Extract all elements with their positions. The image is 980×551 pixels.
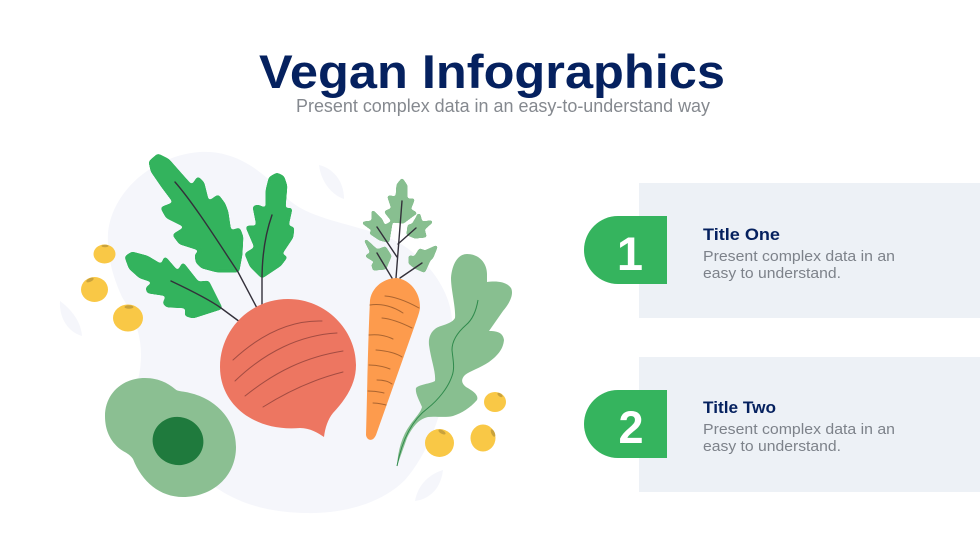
number 2: 2 xyxy=(618,402,644,453)
heading two: Title Two xyxy=(703,398,776,417)
decorative petals xyxy=(60,165,443,501)
beet stems xyxy=(171,182,272,322)
subtitle: Present complex data in an easy-to-understand way xyxy=(296,96,710,116)
number 1: 1 xyxy=(617,227,643,280)
carrot greens xyxy=(364,180,436,271)
number tab 2 xyxy=(584,390,667,458)
title: Vegan Infographics xyxy=(259,45,725,98)
description one: Present complex data in an xyxy=(703,248,895,265)
yellow peas right xyxy=(425,392,506,457)
heading one: Title One xyxy=(703,225,780,244)
beet leaf large xyxy=(150,155,242,271)
yellow peas left xyxy=(81,244,143,332)
beet leaf right xyxy=(246,174,293,277)
panel background xyxy=(639,183,980,318)
leafy green vein xyxy=(397,300,478,466)
description two: Present complex data in an xyxy=(703,421,895,438)
beet leaf small xyxy=(126,253,221,317)
panel: title two xyxy=(584,357,980,492)
leafy green xyxy=(397,254,512,466)
avocado xyxy=(105,378,236,497)
avocado pit xyxy=(147,411,209,471)
panel: title one xyxy=(584,183,980,318)
beet body xyxy=(220,299,356,437)
description two: easy to understand. xyxy=(703,438,841,455)
illustration: vegetables xyxy=(60,152,512,513)
background blob xyxy=(108,152,452,513)
carrot lines xyxy=(368,296,419,405)
carrot body xyxy=(366,278,420,440)
number tab 1 xyxy=(584,216,667,284)
description one: easy to understand. xyxy=(703,265,841,282)
carrot stems xyxy=(377,201,422,278)
panel background xyxy=(639,357,980,492)
beet lines xyxy=(233,321,343,407)
